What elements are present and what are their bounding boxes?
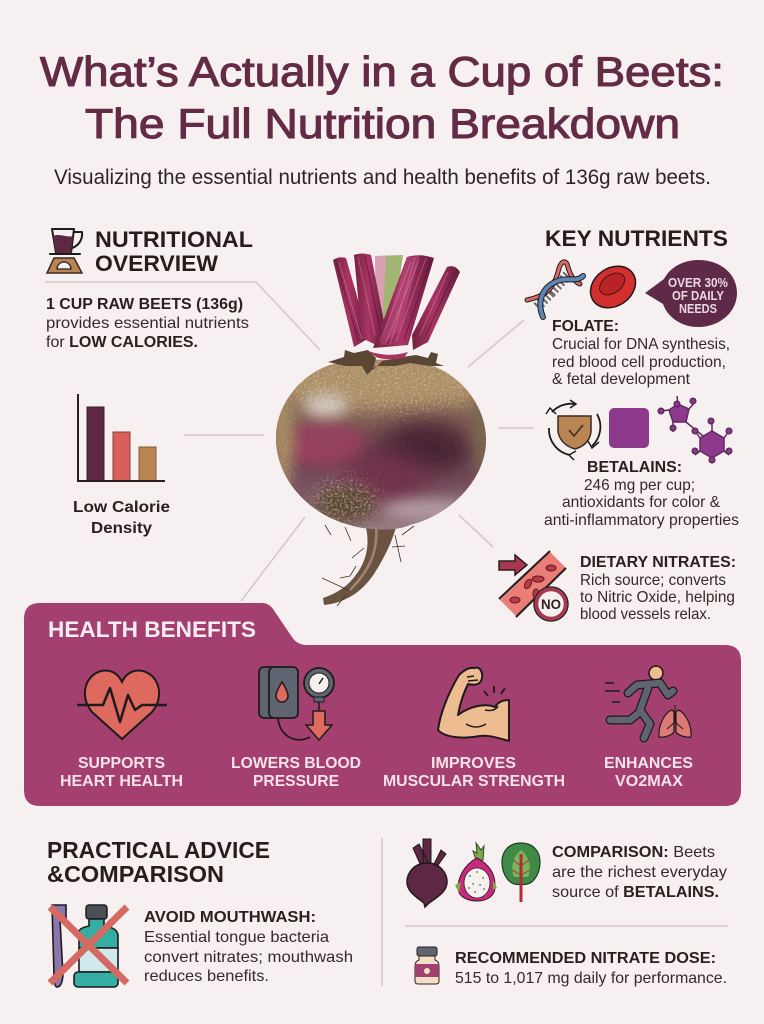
- text: folate: Crucial for DNA synthesis,: [552, 336, 730, 353]
- text: comparison: are the richest everyday: [552, 864, 727, 881]
- label: improves muscular strength: [383, 755, 565, 790]
- text: folate: FOLATE:: [552, 318, 619, 335]
- icon: purple pigment swatch: [609, 408, 649, 448]
- text: betalains: 246 mg per cup;: [584, 477, 695, 494]
- beet body: [276, 360, 486, 530]
- bar chart: low calorie density: Low Calorie: [73, 499, 170, 516]
- text: folate: [552, 318, 730, 388]
- icon: flexed arm: [438, 668, 509, 741]
- text: overview description: provides essential nutrients: [46, 315, 249, 332]
- label: enhances vo2max: VO2MAX: [615, 773, 683, 790]
- bar chart: low calorie density: Density: [91, 520, 152, 537]
- heading: key nutrients: KEY NUTRIENTS: [545, 226, 728, 251]
- heading: nutritional overview: [95, 227, 253, 276]
- icon: heart with pulse: [77, 670, 167, 739]
- text: dietary nitrates: [580, 554, 736, 623]
- text: betalains: antioxidants for color &: [562, 494, 720, 511]
- text: recommended nitrate dose: 515 to 1,017 mg daily for performance.: [455, 970, 727, 987]
- label: improves muscular strength: MUSCULAR STRENGTH: [383, 773, 565, 790]
- text: overview description: [46, 296, 249, 351]
- beet root: [322, 520, 414, 606]
- title: [40, 48, 724, 147]
- heading: health benefits: HEALTH BENEFITS: [48, 617, 256, 642]
- icon: antioxidant shield: [546, 400, 600, 460]
- label: lowers blood pressure: PRESSURE: [253, 773, 339, 790]
- icon: supplement jar: [415, 947, 439, 984]
- bar chart: low calorie density: [73, 394, 170, 537]
- callout: over 30 percent of daily needs: OF DAILY: [672, 288, 724, 303]
- label: supports heart health: HEART HEALTH: [60, 773, 183, 790]
- heading: practical advice and comparison: PRACTICAL ADVICE: [47, 837, 270, 863]
- label: supports heart health: [60, 755, 183, 790]
- text: comparison: [552, 844, 727, 901]
- text: overview description: for LOW CALORIES.: [46, 334, 198, 351]
- title: What’s Actually in a Cup of Beets:: [40, 48, 724, 95]
- beet crown: [328, 350, 444, 375]
- text: folate: red blood cell production,: [552, 354, 726, 371]
- title: The Full Nutrition Breakdown: [85, 100, 680, 147]
- heading: nutritional overview: NUTRITIONAL: [95, 227, 253, 252]
- text: folate: & fetal development: [552, 371, 691, 388]
- label: lowers blood pressure: [231, 755, 361, 790]
- callout: over 30 percent of daily needs: OVER 30%: [668, 275, 728, 290]
- heading: practical advice and comparison: &COMPARISON: [47, 861, 224, 887]
- text: avoid mouthwash: reduces benefits.: [144, 968, 269, 985]
- connector lines: [45, 282, 534, 601]
- text: betalains: anti-inflammatory properties: [544, 512, 739, 529]
- text: avoid mouthwash: Essential tongue bacteria: [144, 929, 329, 946]
- text: avoid mouthwash: [144, 909, 353, 985]
- text: dietary nitrates: to Nitric Oxide, helping: [580, 589, 735, 606]
- icon: crossed-out mouthwash and toothbrush: [50, 905, 127, 987]
- label: enhances vo2max: ENHANCES: [604, 755, 693, 772]
- text: avoid mouthwash: convert nitrates; mouthwash: [144, 949, 353, 966]
- heading: nutritional overview: OVERVIEW: [95, 251, 218, 276]
- icon: DNA helix: [527, 262, 583, 317]
- text: avoid mouthwash: AVOID MOUTHWASH:: [144, 909, 316, 926]
- text: recommended nitrate dose: RECOMMENDED NITRATE DOSE:: [455, 950, 716, 967]
- icon: betalain molecules: [658, 396, 732, 463]
- text: recommended nitrate dose: [455, 950, 727, 987]
- text: dietary nitrates: Rich source; converts: [580, 572, 726, 589]
- panel: health benefits: [24, 603, 741, 806]
- text: dietary nitrates: DIETARY NITRATES:: [580, 554, 736, 571]
- icon: red blood cell: [582, 258, 644, 316]
- text: betalains: [544, 459, 739, 529]
- illustration: whole beet: [270, 254, 495, 606]
- text: dietary nitrates: blood vessels relax.: [580, 606, 711, 623]
- label: improves muscular strength: IMPROVES: [431, 755, 516, 772]
- icon: runner with lungs: [605, 666, 691, 738]
- label: enhances vo2max: [604, 755, 693, 790]
- beet stems: [333, 254, 460, 350]
- subtitle: Visualizing the essential nutrients and health benefits of 136g raw beets.: [54, 166, 711, 189]
- callout: over 30 percent of daily needs: NEEDS: [679, 301, 717, 316]
- label: lowers blood pressure: LOWERS BLOOD: [231, 755, 361, 772]
- text: overview description: 1 CUP RAW BEETS (136g): [46, 296, 243, 313]
- icon: measuring cup on scale: [47, 229, 82, 273]
- icon: blood pressure monitor: [259, 667, 334, 740]
- heading: practical advice and comparison: [47, 837, 270, 887]
- icon: beet: [407, 839, 447, 907]
- callout: over 30 percent of daily needs: [645, 260, 737, 327]
- icon: chard leaf: [502, 843, 540, 902]
- icon: dragon fruit: [455, 843, 497, 901]
- text: betalains: BETALAINS:: [587, 459, 682, 476]
- label: supports heart health: SUPPORTS: [78, 755, 165, 772]
- text: comparison: COMPARISON: Beets: [552, 844, 715, 861]
- text: comparison: source of BETALAINS.: [552, 884, 719, 901]
- icon: blood vessel with nitric oxide: [499, 551, 568, 621]
- icon: blood vessel with nitric oxide: NO: [541, 596, 561, 612]
